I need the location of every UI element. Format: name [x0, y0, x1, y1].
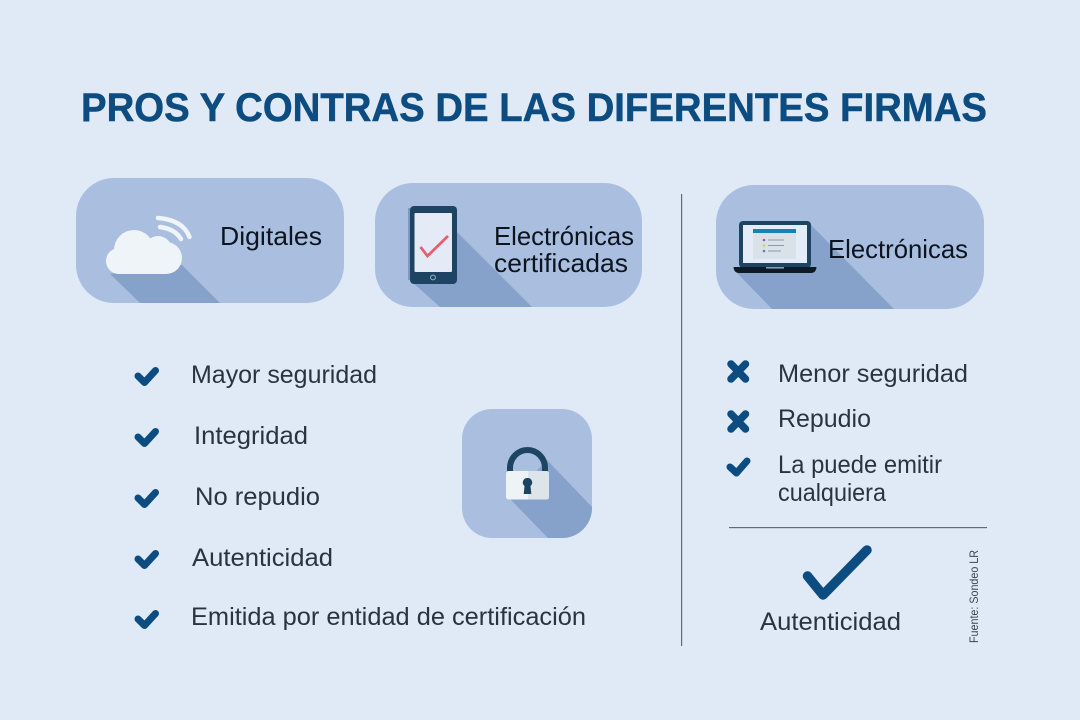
label: Electrónicas certificadas: certificadas [494, 248, 628, 278]
item: Integridad [138, 422, 308, 450]
list: pros de firmas digitales y certificadas [138, 361, 586, 631]
icon: phone with check [408, 206, 532, 307]
label: Digitales: Digitales [220, 221, 322, 251]
item: Menor seguridad: Menor seguridad [778, 360, 968, 388]
icon: padlock [506, 450, 549, 500]
label: Autenticidad: Autenticidad [760, 608, 901, 636]
item: Autenticidad: Autenticidad [192, 544, 333, 572]
label: Electrónicas certificadas: Electrónicas [494, 221, 634, 251]
horizontal divider [729, 527, 987, 528]
icon: large check [808, 550, 867, 595]
source note: Fuente: Sondeo LR [967, 550, 981, 643]
item: La puede emitir cualquiera: cualquiera [778, 479, 886, 507]
item: Integridad: Integridad [194, 422, 308, 450]
panel: Electrónicas [716, 185, 984, 309]
title: PROS Y CONTRAS DE LAS DIFERENTES FIRMAS [81, 86, 987, 130]
panel: Electrónicas certificadas [375, 183, 642, 307]
list: contras de firma electrónica [730, 360, 968, 507]
item: Mayor seguridad: Mayor seguridad [191, 361, 377, 389]
item: No repudio [138, 483, 320, 511]
label: Electrónicas: Electrónicas [828, 234, 968, 264]
item: Emitida por entidad de certificación: Emitida por entidad de certificación [191, 603, 586, 631]
item: Repudio [731, 405, 871, 433]
panel: padlock [462, 409, 592, 538]
icon: cloud with signal [106, 218, 220, 303]
icon: laptop [734, 221, 894, 309]
vertical divider [681, 194, 682, 646]
item: Repudio: Repudio [778, 405, 871, 433]
label: Electrónicas certificadas [494, 221, 634, 278]
item: No repudio: No repudio [195, 483, 320, 511]
item: La puede emitir cualquiera [730, 451, 942, 507]
panel: Digitales [76, 178, 344, 303]
item: La puede emitir cualquiera: La puede emitir [778, 451, 942, 479]
